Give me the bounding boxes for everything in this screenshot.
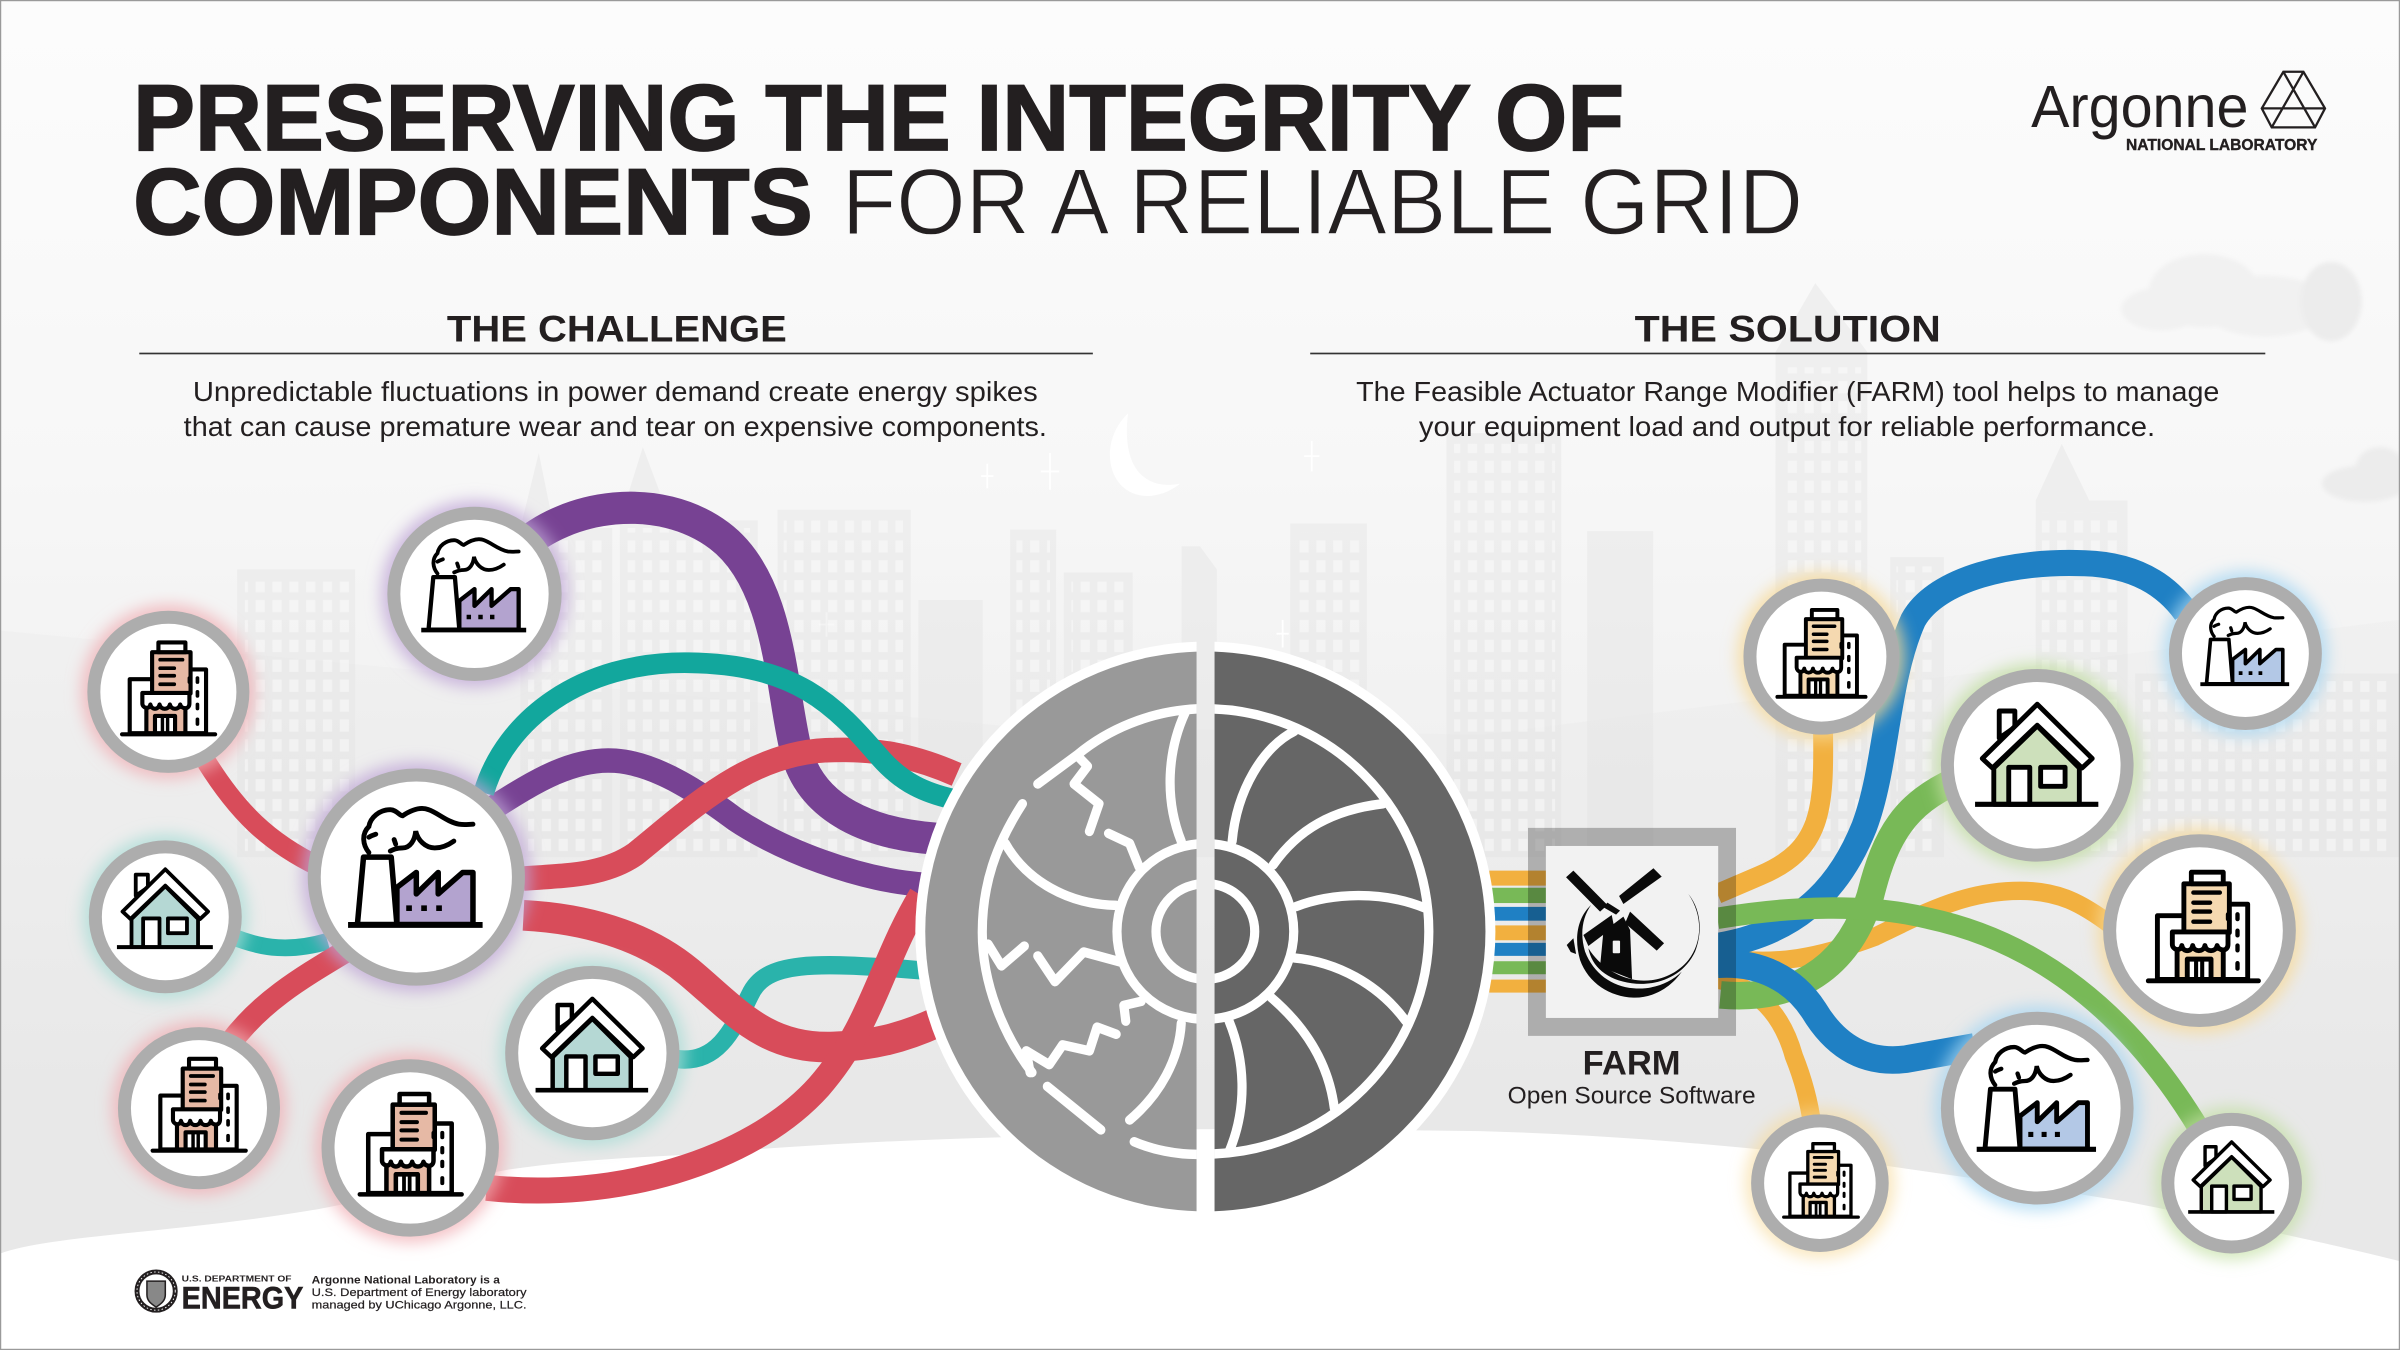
- logo: Argonne: Argonne: [2031, 73, 2248, 140]
- logo: U.S. Department of Energy: U.S. DEPARTMENT OF: [182, 1274, 292, 1284]
- title: [133, 65, 1803, 254]
- label: FARM: Open Source Software: [1508, 1084, 1756, 1110]
- text: challenge description: Unpredictable fluctuations in power demand create energy spikes: [193, 376, 1038, 407]
- node: factory top (challenge): [381, 501, 568, 687]
- node: building lower-left (challenge): [112, 1021, 286, 1195]
- node: building large (solution): [2097, 828, 2302, 1033]
- text: solution description: [1356, 376, 2219, 442]
- node: house large (solution): [1935, 663, 2140, 868]
- text: challenge description: [184, 376, 1047, 442]
- title: FOR A RELIABLE GRID: [842, 149, 1803, 254]
- heading: the challenge: THE CHALLENGE: [447, 308, 787, 349]
- moon and stars: [819, 413, 1319, 647]
- title: COMPONENTS: [133, 149, 813, 254]
- label: FARM: [1508, 1044, 1756, 1110]
- node: house lower (challenge): [499, 960, 686, 1146]
- icon: windmill: [1566, 868, 1700, 998]
- node: building small (solution): [1745, 1108, 1895, 1258]
- text: solution description: your equipment load and output for reliable performance.: [1419, 411, 2155, 442]
- logo: Argonne: NATIONAL LABORATORY: [2126, 137, 2317, 154]
- node: factory centre (challenge): [302, 762, 531, 992]
- logo: Argonne: [2031, 72, 2325, 154]
- text: solution description: The Feasible Actuator Range Modifier (FARM) tool helps to manage: [1356, 376, 2219, 407]
- heading: the solution: THE SOLUTION: [1635, 308, 1941, 349]
- FARM box: [1528, 828, 1736, 1036]
- harness: turbine to FARM: [1489, 871, 1546, 993]
- clouds: [2121, 254, 2400, 502]
- white ground hill: [0, 1129, 2400, 1350]
- turbine: damaged half: [915, 642, 1197, 1212]
- label: FARM: FARM: [1583, 1044, 1681, 1082]
- text: footer note: managed by UChicago Argonne, LLC.: [312, 1300, 527, 1312]
- node: house small (solution): [2155, 1107, 2308, 1260]
- text: challenge description: that can cause premature wear and tear on expensive components.: [184, 411, 1047, 442]
- node: factory large (solution): [1935, 1006, 2140, 1211]
- node: building top (solution): [1737, 572, 1906, 741]
- turbine: damaged and healthy halves: [915, 642, 1495, 1221]
- node: house left (challenge): [83, 834, 248, 999]
- logo: U.S. Department of Energy: [137, 1272, 304, 1316]
- title: PRESERVING THE INTEGRITY OF: [133, 65, 1624, 170]
- node: factory top-right (solution): [2163, 571, 2328, 736]
- node: building bottom (challenge): [315, 1053, 505, 1243]
- node: building top-left (challenge): [81, 605, 256, 779]
- connectors: challenge network: [207, 508, 957, 1191]
- skyline: [237, 283, 2400, 857]
- turbine: healthy half: [1214, 642, 1496, 1212]
- connectors: solution network: [1717, 563, 2199, 1130]
- text: footer note: Argonne National Laboratory is a: [312, 1274, 501, 1286]
- text: footer note: [312, 1274, 527, 1312]
- text: footer note: U.S. Department of Energy laboratory: [312, 1287, 527, 1299]
- logo: U.S. Department of Energy: ENERGY: [182, 1281, 304, 1316]
